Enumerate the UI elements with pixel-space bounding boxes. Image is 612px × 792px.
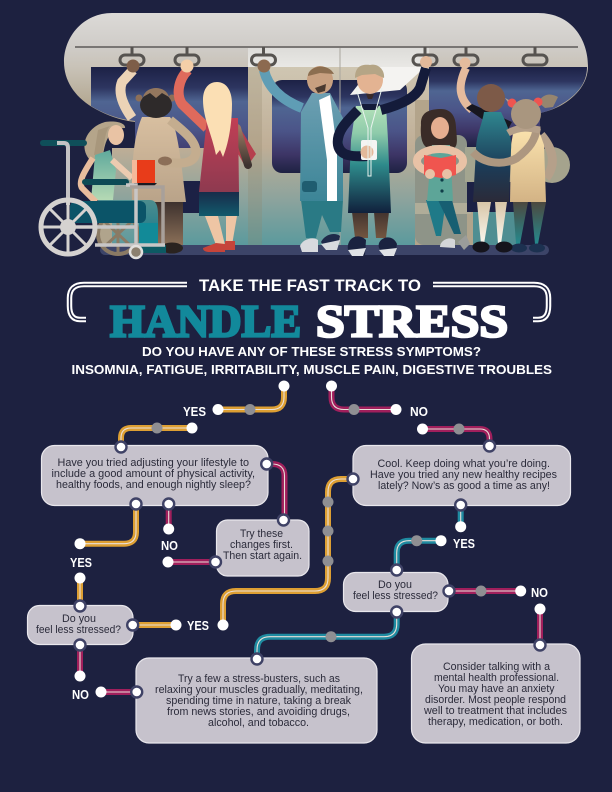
magenta track: start to no — [326, 380, 402, 415]
question: stress symptoms: DO YOU HAVE ANY OF THESE STRESS SYMPTOMS? — [142, 345, 481, 359]
passenger: woman in wheelchair — [41, 121, 166, 258]
label: yes 2: YES — [70, 556, 92, 570]
label: yes 1: YES — [183, 405, 206, 419]
box: cool, keep doing what you're doing: lately? Now’s as good a time as any! — [378, 480, 550, 492]
passenger: woman with long blonde hair — [179, 60, 256, 252]
passenger: man in tan coat — [120, 60, 196, 254]
passengers: embracing woman and child — [460, 58, 570, 252]
box: try a few stress-busters: relaxing your muscles gradually, meditating, — [155, 684, 363, 696]
box: try a few stress-busters: alcohol, and tobacco. — [208, 717, 309, 729]
box: do you feel less stressed, left — [28, 600, 138, 650]
title: stress: STRESS — [316, 296, 508, 346]
label: no 2: NO — [161, 539, 178, 553]
box: try these changes first: Try these — [240, 528, 283, 540]
box: try a few stress-busters: spending time in nature, taking a break — [166, 695, 352, 707]
magenta track: no to cool box — [417, 424, 490, 446]
box: do you feel less stressed, right: Do you — [378, 579, 412, 591]
magenta track: lifestyle box to no — [163, 504, 174, 534]
box: adjusting your lifestyle: Have you tried adjusting your lifestyle to — [58, 457, 249, 469]
heading: take the fast track to: TAKE THE FAST TRACK TO — [199, 277, 421, 295]
passenger: man in lab coat — [258, 60, 343, 252]
box: do you feel less stressed, left: feel less stressed? — [36, 624, 121, 636]
box: do you feel less stressed, right: feel less stressed? — [353, 590, 438, 602]
box: do you feel less stressed, left: Do you — [62, 613, 96, 625]
magenta track: right feel-less-stressed box to no — [449, 586, 526, 596]
hanging straps — [120, 47, 547, 65]
magenta track: no to professional help box — [534, 604, 546, 645]
magenta track: left feel-less-stressed box to no — [74, 645, 86, 682]
flowchart tracks — [74, 380, 546, 698]
box: cool, keep doing what you're doing: Cool. Keep doing what you’re doing. — [378, 458, 550, 470]
magenta track: lifestyle box to try these changes — [267, 464, 284, 520]
box: talk with a mental health professional — [412, 640, 580, 743]
gold track: yes up to cool box — [218, 479, 353, 630]
box: try these changes first — [210, 514, 309, 576]
teal track: cool box to yes — [455, 505, 466, 532]
box: cool, keep doing what you're doing: Have you tried any new healthy recipes — [370, 469, 557, 481]
box: cool, keep doing what you're doing — [348, 440, 570, 510]
title: handle: HANDLE — [110, 296, 301, 346]
magenta track: no to stress-busters box — [96, 686, 137, 698]
floor — [100, 245, 549, 255]
illustration: subway car with passengers — [41, 13, 588, 258]
passenger: girl reading a red book — [417, 109, 470, 250]
heading bracket: right — [433, 284, 548, 320]
gold track: yes to lifestyle box — [121, 422, 198, 447]
label: yes 3: YES — [187, 619, 209, 633]
box: do you feel less stressed, right — [344, 564, 454, 618]
heading bracket: left — [70, 284, 187, 320]
box: talk with a mental health professional: therapy, medication, or both. — [428, 716, 563, 728]
box: talk with a mental health professional: disorder. Most people respond — [425, 694, 566, 706]
box: talk with a mental health professional: well to treatment that includes — [423, 705, 567, 717]
box: try these changes first: Then start again. — [223, 550, 302, 562]
seats — [415, 135, 518, 245]
label: no 3: NO — [531, 586, 548, 600]
box: adjusting your lifestyle: healthy foods, and enough nightly sleep? — [56, 479, 251, 491]
label: yes 4: YES — [453, 537, 475, 551]
box: talk with a mental health professional: mental health professional. — [434, 672, 559, 684]
gold track: yes to left feel-less-stressed box — [74, 572, 86, 606]
box: try a few stress-busters: from news stories, and avoiding drugs, — [167, 706, 350, 718]
label: no 1: NO — [410, 405, 428, 419]
train car body — [64, 13, 588, 245]
box: talk with a mental health professional: You may have an anxiety — [438, 683, 555, 695]
passenger: man with earphones and phone — [338, 56, 432, 256]
gold track: start to yes — [212, 380, 290, 415]
teal track: yes to right feel-less-stressed box — [397, 535, 446, 570]
teal track: right feel-less-stressed box to stress-busters box — [257, 612, 397, 659]
list of symptoms: INSOMNIA, FATIGUE, IRRITABILITY, MUSCLE PAIN, DIGESTIVE TROUBLES — [72, 363, 552, 377]
box: try a few stress-busters: Try a few a stress-busters, such as — [178, 673, 340, 685]
box: try these changes first: changes first. — [230, 539, 293, 551]
box: adjusting your lifestyle: include a good amount of physical activity, — [52, 468, 255, 480]
gold track: lifestyle box to yes — [74, 504, 136, 549]
gold track: left feel-less-stressed box to yes — [133, 620, 182, 630]
label: no 4: NO — [72, 688, 89, 702]
magenta track: no to try these changes — [162, 556, 215, 568]
box: try a few stress-busters — [131, 654, 377, 743]
box: talk with a mental health professional: Consider talking with a — [443, 661, 550, 673]
box: adjusting your lifestyle — [42, 442, 272, 510]
branch labels — [70, 405, 548, 702]
